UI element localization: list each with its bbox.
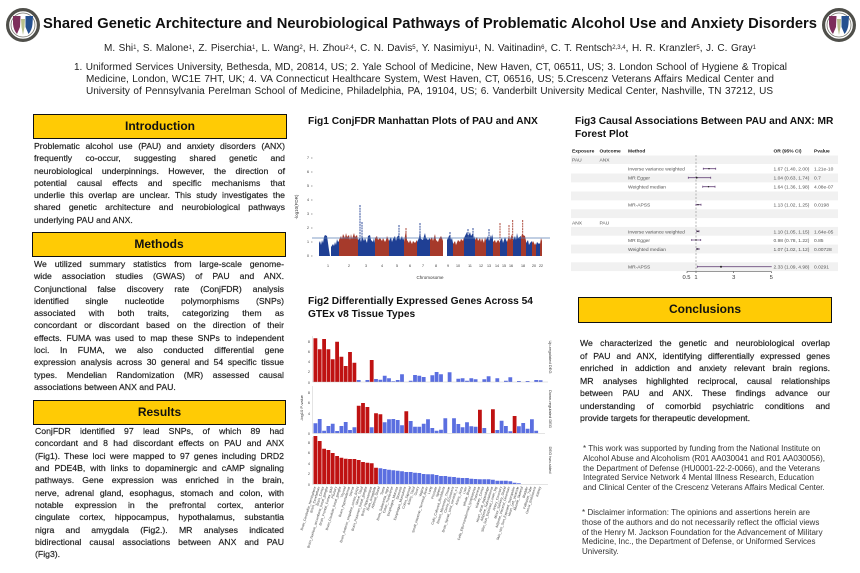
tissue labels: Brain_Cerebellum: [309, 486, 321, 513]
logo: right university emblem: [822, 8, 856, 42]
chart: MR forest plot: 1.04 (0.63, 1.74): [774, 176, 810, 182]
heading: Fig3: [575, 116, 834, 140]
chart: differentially expressed genes bars: 2: [308, 370, 310, 374]
chart: Manhattan plot: 14: [495, 264, 499, 268]
chart: Manhattan plot: 2: [348, 264, 350, 268]
text: results body: pathways. Gene expression was enriched in the brain,: [35, 475, 284, 485]
tissue labels: Cervix_Endocervix: [525, 486, 537, 514]
chart: MR forest plot: 1.07 (1.02, 1.12): [774, 247, 810, 253]
text: funding note: Integrated Service Network 4 Mental Illness Research, Education: [583, 473, 814, 482]
authors: M. Shi1, S. Malone1, Z. Piserchia1, L. Wang2, H. Zhou2,4, C. N. Davis5, Y. Nasimiyu1, N. Vaitinadin6, C. T. Rentsch2,3,4, H. R. Kranzler5, J. C. Gray1: [104, 43, 756, 54]
chart: Manhattan plot: 4: [307, 198, 309, 202]
chart: MR forest plot: Pvalue: [814, 148, 830, 154]
chart: Manhattan plot: 0: [307, 254, 309, 258]
chart: MR forest plot: 0.5: [682, 275, 691, 281]
chart: MR forest plot: 1.64 (1.36, 1.98): [774, 185, 810, 191]
chart: MR forest plot: 1.64e-05: [814, 229, 834, 235]
chart: Manhattan plot: 18: [521, 264, 525, 268]
chart: MR forest plot: 0.0291: [814, 265, 829, 271]
chart: MR forest plot: PAU: [600, 220, 610, 226]
chart: Manhattan plot: -log10(FDR): [294, 194, 299, 219]
tissue labels: Brain_Hippocampus: [360, 486, 373, 517]
tissue labels: Brain_Caudate_basal_ganglia: [325, 486, 342, 531]
text: results body: notable expression in the prefrontal cortex, anterior: [35, 500, 284, 510]
tissue labels: Brain_Spinal_cord_cervical_c-1: [441, 486, 459, 533]
tissue labels: Brain_Anterior_cingulate_cortex_BA24: [339, 486, 360, 543]
tissue labels: Heart_Atrial_Appendage: [475, 486, 490, 523]
tissue labels: Artery_Aorta: [455, 486, 464, 506]
chart: Manhattan plot: 5: [396, 264, 398, 268]
text: methods body: identified single nucleotide polymorphisms (SNPs): [34, 296, 284, 306]
text: methods body: effects. FUMA was used to map these SNPs to independent: [34, 333, 284, 343]
chart: differentially expressed genes bars: -log10 P-value: [299, 394, 304, 421]
tissue labels: Ovary: [413, 486, 420, 496]
affiliations: [74, 62, 787, 97]
text: results body: and PDE4B, with links to dopaminergic and cAMP signaling: [35, 463, 284, 473]
tissue labels: Liver: [462, 485, 468, 494]
chart: Manhattan plot: 15: [502, 264, 506, 268]
text: disclaimer note: of the Henry M. Jackson Foundation for the Advancement of Military: [582, 528, 823, 536]
tissue labels: Uterus: [348, 486, 355, 497]
chart: MR forest plot: 1: [694, 275, 698, 281]
text: methods body: expression analysis across 30 general and 54 specific tissue: [34, 357, 284, 367]
text: conclusions body: understanding of comorbid psychiatric conditions and: [580, 400, 830, 410]
tissue labels: Cervix_Ectocervix: [443, 486, 455, 513]
tissue labels: Testis: [380, 486, 386, 496]
text: disclaimer note: Medicine, Inc., the Department of Defense, or Uniformed Services: [582, 537, 815, 546]
spikes: [360, 205, 523, 240]
tissue labels: Esophagus_Muscularis: [393, 486, 407, 521]
tissue labels: Thyroid: [340, 486, 347, 498]
chart: MR forest plot: Exposure: [572, 148, 595, 154]
chart: MR forest plot: 0.0198: [814, 203, 829, 209]
text: introduction body: underlie this overlap are unclear. This study investigates the: [34, 190, 285, 200]
tissue labels: Colon_Transverse: [382, 486, 394, 514]
text: results body: concordant and 8 had discordant effects on PAU and ANX: [35, 438, 284, 448]
chart: MR forest plot: 0.98 (0.78, 1.22): [774, 238, 810, 244]
heading: Fig2: Fig2 Differentially Expressed Genes Across 54: [308, 296, 533, 307]
tissue labels: Adipose_Visceral_Omentum: [495, 486, 511, 528]
chart: MR forest plot: ANX: [572, 220, 583, 226]
text: results body: cingulate cortex, hippocampus, hypothalamus, substantia: [35, 512, 284, 522]
chart: MR forest plot: 0.7: [814, 176, 821, 182]
text: disclaimer note: * Disclaimer information: The opinions and assertions herein are: [582, 508, 810, 517]
text: methods body: types. Mendelian Randomization (MR) assessed causal: [34, 370, 284, 380]
chart: MR forest plot: OR (95% CI): [774, 148, 802, 154]
tissue labels: Cells_EBV-transformed_lymphocytes: [457, 486, 477, 541]
heading: Fig2: [308, 296, 533, 320]
chart: Manhattan plot: 7: [307, 156, 309, 160]
tissue labels: Adrenal_Gland: [371, 486, 381, 509]
text: methods body: We utilized summary statistics from large-scale genome-: [34, 259, 284, 269]
chart: MR forest plot: ANX: [600, 158, 610, 164]
text: methods body: associations between ANX and PAU.: [34, 382, 176, 392]
heading: Conclusions: [578, 297, 832, 323]
chart: Manhattan plot: 3: [365, 264, 367, 268]
tissue labels: Pituitary: [331, 486, 338, 499]
text: introduction body: Problematic alcohol use (PAU) and anxiety disorders (ANX): [34, 141, 285, 151]
tissue labels: Stomach: [395, 486, 403, 500]
tissue labels: Heart_Left_Ventricle: [507, 486, 520, 517]
tissue labels: Fallopian_Tube: [522, 486, 533, 510]
chart: Manhattan plot: 8: [435, 264, 437, 268]
chart: MR forest plot: 1.13 (1.02, 1.25): [774, 203, 810, 209]
text: results body: nerve, adrenal gland, esophagus, stomach and colon, with: [35, 488, 284, 498]
chart: Manhattan plot: 4: [381, 264, 383, 268]
chart: Manhattan plot: 1: [307, 240, 309, 244]
chart: differentially expressed genes bars: Up-regulated DEG: [548, 341, 553, 373]
chart: MR forest plot: MR Egger: [628, 176, 650, 182]
chart: differentially expressed genes bars: 0: [308, 432, 310, 436]
text: conclusions body: between PAU and ANX. These findings advance our: [580, 388, 830, 398]
tissue labels: Artery_Tibial: [407, 486, 416, 505]
text: methods body: loci. In FUMA, we also conducted differential gene: [34, 345, 284, 355]
text: disclaimer note: those of the authors and do not necessarily reflect the official views: [582, 518, 819, 527]
tissue labels: Brain_Frontal_Cortex_BA9: [318, 486, 334, 526]
chart: Manhattan plot: 12: [479, 264, 483, 268]
chart: MR forest plot: MR-APSS: [628, 203, 651, 209]
chart: Manhattan plot: Chromosome: [416, 275, 444, 280]
title: Shared Genetic Architecture and Neurobiological Pathways of Problematic Alcohol Use and Anxiety Disorders: [43, 16, 817, 32]
tissue labels: Brain_Nucleus_accumbens_basal_ganglia: [306, 486, 329, 549]
chart: differentially expressed genes bars: 0: [308, 381, 310, 385]
text: methods body: concordant or discordant based on the direction of their: [34, 320, 284, 330]
heading: Results: [33, 400, 286, 425]
tissue labels: Colon_Sigmoid: [401, 486, 412, 509]
heading: Introduction: Introduction: [125, 119, 195, 133]
chart: MR forest plot: 1.10 (1.05, 1.15): [774, 229, 810, 235]
text: methods body: associated with both traits, categorizing them as: [34, 308, 284, 318]
chart: MR forest plot: 2.33 (1.09, 4.98): [774, 265, 810, 271]
affiliations: Medicine, London, WC1E 7HT, UK; 4. VA Connecticut Healthcare System, West Haven, CT, 06516, US; 5.Crescenz Veterans Affairs Medical Center and: [86, 74, 774, 85]
chart: differentially expressed genes bars: 8: [308, 391, 310, 395]
tissue labels: Brain_Amygdala: [366, 486, 377, 511]
chart: Manhattan plot: 3: [307, 212, 309, 216]
chart: MR forest plot: PAU: [572, 158, 582, 164]
text: introduction body: [34, 141, 286, 225]
chart: Manhattan plot: 11: [468, 264, 472, 268]
chart: Manhattan plot: 5: [307, 184, 309, 188]
chart: Manhattan plot: 9: [447, 264, 449, 268]
tissue labels: Brain_Substantia_nigra: [376, 486, 390, 521]
text: results body: nigra and amygdala (Fig2.). MR analyses indicated: [35, 525, 284, 535]
tissue labels: Brain_Cortex: [315, 486, 325, 506]
tissue labels: Prostate: [430, 486, 438, 499]
chart: MR forest plot: MR-APSS: [628, 265, 651, 271]
text: methods body: Conjunctional false discovery rate (ConjFDR) analysis: [34, 284, 284, 294]
chart: Manhattan plot: 16: [509, 264, 513, 268]
text: results body: (Fig3).: [35, 549, 60, 559]
heading: Fig3: Fig3 Causal Associations Between PAU and ANX: MR: [575, 116, 833, 127]
chart: Manhattan plot: 20: [532, 264, 536, 268]
tissue labels: Muscle_Skeletal: [513, 486, 524, 511]
heading: Results: Results: [138, 405, 181, 419]
chart: differentially expressed genes bars: 4: [308, 360, 310, 364]
text: conclusions body: of PAU and ANX, identifying differentially expressed genes: [580, 350, 830, 360]
heading: Methods: Methods: [134, 237, 184, 251]
tissue labels: Esophagus_Mucosa: [386, 486, 399, 517]
affiliations: 1. Uniformed Services University, Bethesda, MD, 20814, US; 2. Yale School of Medicine, New Haven, CT, 06511, US; 3. London School of Hygiene & Tropical: [74, 62, 787, 73]
chart: differentially expressed genes bars: 0: [308, 483, 310, 487]
heading: Methods: [32, 232, 286, 257]
chart: MR forest plot: 1.67 (1.40, 2.00): [774, 167, 810, 173]
tissue labels: Bladder: [522, 485, 529, 498]
chart: Manhattan plot: 22: [539, 264, 543, 268]
tissue labels: Brain_Cerebellar_Hemisphere: [300, 486, 317, 531]
text: introduction body: frequently co-occur, suggesting shared genetic and: [34, 153, 285, 163]
chart: MR forest plot: Weighted median: [628, 247, 666, 253]
tissue labels: Vagina: [418, 486, 425, 497]
text: results body: ConjFDR identified 97 lead SNPs, of which 89 had: [35, 426, 284, 436]
text: results body: bidirectional causal associations between ANX and PAU: [35, 537, 284, 547]
text: funding note: [583, 444, 825, 492]
heading: Conclusions: Conclusions: [669, 302, 741, 316]
chart: differentially expressed genes bars: 8: [308, 441, 310, 445]
chart: Manhattan plot: 7: [422, 264, 424, 268]
chart: differentially expressed genes bars: 4: [308, 462, 310, 466]
chart: Manhattan plot: 6: [409, 264, 411, 268]
text: results body: [35, 426, 284, 559]
text: funding note: and Clinical Center of the Crescenz Veterans Affairs Medical Center.: [583, 483, 825, 492]
text: methods body: [34, 259, 284, 392]
chart: differentially expressed genes bars: 6: [308, 401, 310, 405]
chart: MR forest plot: Inverse variance weighted: [628, 229, 685, 235]
chart: MR forest plot: Method: [628, 148, 645, 154]
chart: differentially expressed genes bars: 6: [308, 350, 310, 354]
affiliations: University of Pennsylvania Perelman School of Medicine, Philadelphia, PA, 19104, US; 6. Vanderbilt University Medical Center, Nashville, TN 37212, US: [86, 86, 773, 97]
text: introduction body: underlying PAU and ANX.: [34, 215, 133, 225]
chart: MR forest plot: 5: [770, 275, 773, 281]
tissue labels: Minor_Salivary_Gland: [493, 486, 507, 519]
text: funding note: Alcohol Abuse and Alcoholism (R01 AA030041 and R01 AA030056),: [583, 454, 825, 463]
chart: MR forest plot: Outcome: [600, 148, 621, 154]
chart: MR forest plot: 4.08e-07: [814, 185, 834, 191]
tissue labels: Adipose_Subcutaneous: [480, 486, 494, 522]
text: conclusions body: enriched in addiction and anxiety relevant brain regions.: [580, 363, 830, 373]
tissue labels: [300, 485, 542, 549]
tissue labels: Kidney: [535, 486, 542, 497]
tissue labels: Spleen: [435, 486, 442, 497]
chart: Manhattan plot: 1: [327, 264, 329, 268]
text: methods body: wide association studies (GWAS) of PAU and ANX.: [34, 271, 284, 281]
chart: MR forest plot: Inverse variance weighted: [628, 167, 685, 173]
text: conclusions body: provide targets for therapeutic development.: [580, 413, 750, 423]
heading: Fig1: Fig1 ConjFDR Manhattan Plots of PAU and ANX: [308, 116, 538, 127]
text: results body: (Fig1). These loci were mapped to 97 genes including DRD2: [35, 451, 284, 461]
tissue labels: Nerve_Tibial: [355, 486, 364, 505]
chart: differentially expressed genes bars: 6: [308, 451, 310, 455]
tissue labels: Brain_Putamen_basal_ganglia: [351, 486, 368, 531]
chart: MR forest plot: MR Egger: [628, 238, 650, 244]
tissue labels: Whole_Blood: [462, 486, 472, 507]
text: introduction body: neurobiological underpinnings. However, the direction of: [34, 166, 285, 176]
text: introduction body: potential causal effects and specific mechanisms that: [34, 178, 285, 188]
chart: differentially expressed genes bars: 4: [308, 412, 310, 416]
text: conclusions body: We characterized the genetic and neurobiological overlap: [580, 338, 830, 348]
tissue labels: Kidney_Cortex: [475, 486, 485, 509]
chart: Manhattan plot: 6: [307, 170, 309, 174]
chart: MR forest plot: 1.21e-10: [814, 167, 834, 173]
text: disclaimer note: [582, 508, 823, 556]
tissue labels: Artery_Coronary: [492, 486, 503, 511]
chart: differentially expressed genes bars: 8: [308, 340, 310, 344]
chart: differentially expressed genes bars: 2: [308, 472, 310, 476]
text: funding note: the Department of Defense (HU0001-22-2-0066), and the Veterans: [583, 464, 820, 472]
heading: Fig2: GTEx v8 Tissue Types: [308, 308, 415, 320]
chart: MR forest plot: Weighted median: [628, 185, 666, 191]
text: introduction body: shared genetic architecture and neurobiological pathways: [34, 202, 285, 212]
tissue labels: Small_Intestine_Terminal_Ileum: [411, 486, 429, 533]
text: conclusions body: MR analyses highlighted reciprocal, causal relationships: [580, 376, 830, 386]
tissue labels: Breast_Mammary_Tissue: [436, 486, 451, 524]
tissue labels: Brain_Hypothalamus: [338, 486, 351, 517]
tissue labels: Skin_Not_Sun_Exposed_Suprapubic: [496, 486, 516, 541]
chart: differentially expressed genes bars: DEG two-sided: [548, 447, 553, 473]
text: funding note: * This work was supported by funding from the National Institute on: [583, 444, 820, 453]
chart: Manhattan plot: 2: [307, 226, 309, 230]
logo: left university emblem: [6, 8, 40, 42]
text: conclusions body: [580, 338, 830, 423]
chart: differentially expressed genes bars: Down-regulated DEG: [548, 390, 553, 428]
chart: Manhattan plot: 13: [487, 264, 491, 268]
chart: Manhattan plot: 10: [456, 264, 460, 268]
chart: MR forest plot: 3: [732, 275, 735, 281]
tissue labels: Lung: [427, 486, 433, 495]
tissue labels: Skin_Sun_Exposed_Lower_leg: [480, 486, 498, 532]
heading: Fig3: Forest Plot: [575, 128, 628, 140]
heading: Introduction: [33, 114, 287, 139]
tissue labels: Cells_Cultured_fibroblasts: [431, 486, 446, 525]
chart: MR forest plot: 0.00728: [814, 247, 832, 253]
tissue labels: Pancreas: [473, 486, 481, 501]
chart: MR forest plot: 0.85: [814, 238, 824, 244]
text: disclaimer note: University.: [582, 547, 619, 556]
